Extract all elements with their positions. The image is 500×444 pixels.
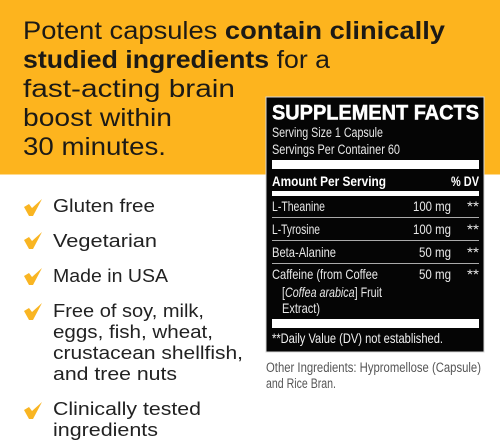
row: beta-alanine: **: [467, 244, 480, 260]
serving info: Serving Size 1 Capsule: [272, 125, 383, 140]
checklist: [24, 195, 243, 440]
row: beta-alanine: Beta-Alanine: [272, 244, 336, 260]
row: l-theanine: **: [467, 198, 480, 214]
icon: check gluten free: [24, 199, 42, 216]
row: l-tyrosine: **: [467, 221, 480, 237]
serving info: [272, 125, 400, 157]
item: free of allergens: eggs, fish, wheat,: [53, 321, 213, 342]
row: caffeine: 50 mg: [419, 266, 451, 282]
headline: fast-acting brain: [23, 75, 235, 103]
headline: Potent capsules contain clinically: [23, 17, 445, 45]
table header: [272, 173, 480, 189]
table header: % DV: [451, 173, 480, 189]
headline: studied ingredients for a: [23, 46, 330, 74]
icon: check free of allergens: [24, 303, 42, 320]
row: l-tyrosine: 100 mg: [413, 221, 451, 237]
other ingredients: [266, 360, 481, 391]
row: l-theanine: [272, 198, 480, 214]
icon: check made in usa: [24, 268, 42, 285]
icon: check clinically tested: [24, 402, 42, 419]
row: beta-alanine: [272, 244, 480, 260]
row: l-tyrosine: L-Tyrosine: [272, 221, 320, 237]
row: caffeine: [272, 266, 480, 316]
item: clinically tested: ingredients: [53, 419, 158, 440]
panel: supplement facts: [266, 97, 484, 352]
row: beta-alanine: 50 mg: [419, 244, 451, 260]
item: vegetarian: Vegetarian: [53, 230, 157, 251]
row: l-theanine: 100 mg: [413, 198, 451, 214]
row: caffeine: Caffeine (from Coffee: [272, 266, 378, 282]
footnote: **Daily Value (DV) not established.: [272, 330, 443, 346]
row: caffeine: **: [467, 266, 480, 282]
item: gluten free: Gluten free: [53, 195, 155, 216]
item: free of allergens: Free of soy, milk,: [53, 300, 204, 321]
row: caffeine: Extract): [282, 300, 320, 316]
item: clinically tested: Clinically tested: [53, 398, 201, 419]
yellow banner: [0, 0, 500, 174]
headline: 30 minutes.: [23, 133, 166, 161]
row: caffeine: [Coffea arabica] Fruit: [282, 284, 382, 300]
item: made in usa: Made in USA: [53, 265, 169, 286]
row: l-theanine: L-Theanine: [272, 198, 325, 214]
headline: boost within: [23, 104, 172, 132]
serving info: Servings Per Container 60: [272, 142, 400, 157]
row: l-tyrosine: [272, 221, 480, 237]
item: free of allergens: crustacean shellfish,: [53, 342, 243, 363]
headline: [23, 17, 445, 161]
item: free of allergens: [53, 300, 243, 384]
item: clinically tested: [53, 398, 201, 440]
item: free of allergens: and tree nuts: [53, 363, 177, 384]
table header: Amount Per Serving: [272, 173, 386, 189]
icon: check vegetarian: [24, 232, 42, 249]
other ingredients: and Rice Bran.: [266, 376, 336, 391]
heading: supplement facts: SUPPLEMENT FACTS: [272, 102, 479, 124]
